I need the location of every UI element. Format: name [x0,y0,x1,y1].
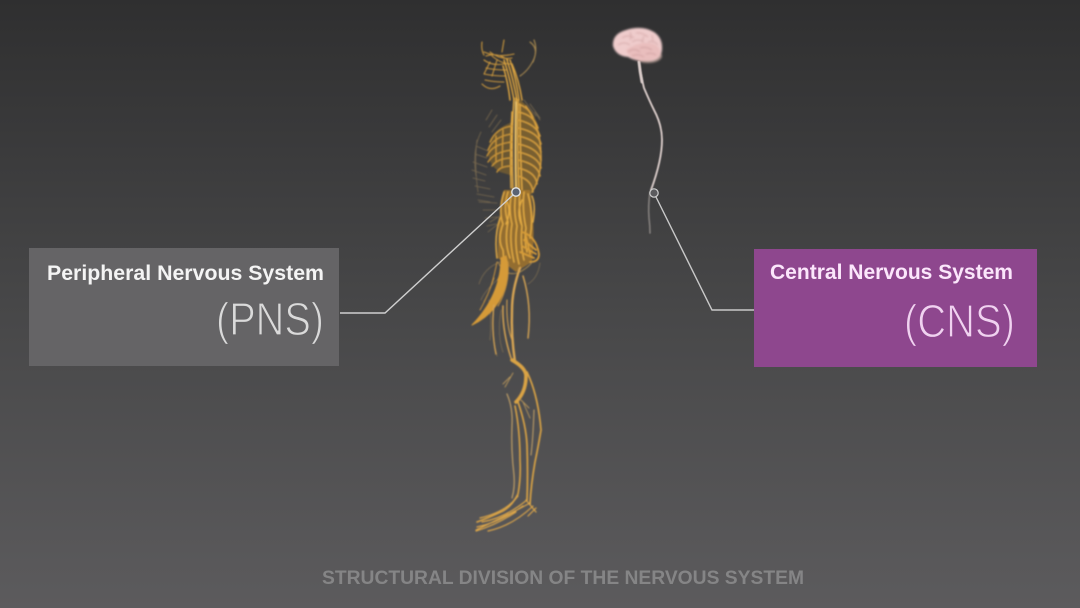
back torso fill [517,100,541,194]
abbreviation: CNS: (CNS) [904,295,1015,347]
panel: Central Nervous System [754,249,1037,367]
abdominal nerve mass [498,190,534,272]
thigh nerves [493,268,529,362]
figure: peripheral nervous system nerves [472,40,541,531]
connector: CNS leader line [656,197,754,310]
heading: PNS name: Peripheral Nervous System [47,261,324,285]
femoral nerve bundle [472,256,508,325]
lower leg and knee nerves [477,360,541,522]
spinal trunk [511,98,522,192]
spinal cord [639,62,662,233]
rib nerves: front [487,126,512,172]
faint outer nerve strands [472,100,540,356]
front torso fill [488,122,513,176]
marker: PNS point [512,188,520,196]
brain [613,28,662,63]
panel: Peripheral Nervous System [29,248,339,366]
marker: CNS point [650,189,658,197]
caption: STRUCTURAL DIVISION OF THE NERVOUS SYSTEM [322,567,804,589]
heading: CNS name: Central Nervous System [770,260,1013,284]
abbreviation: PNS: (PNS) [216,293,324,345]
figure: central nervous system [613,28,662,233]
neck trunk [503,60,522,100]
foot nerves [476,496,536,531]
hip nerve plexus [498,232,539,274]
head and face nerves [482,40,536,89]
connector: PNS leader line [340,195,513,313]
rib nerves: back [518,104,541,192]
